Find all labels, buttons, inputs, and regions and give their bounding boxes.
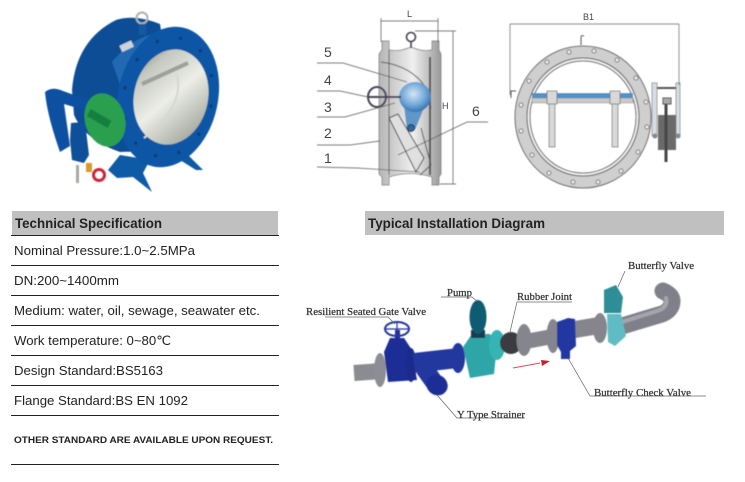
flange bolts [110,27,226,167]
top eye bolt [406,32,416,48]
blue counterweight [399,82,431,132]
leader lines [325,271,706,418]
internal disc and shaft [142,63,188,138]
label: butterfly check valve: Butterfly Check Valve [594,387,691,399]
work temperature: Work temperature: 0~80℃ [14,333,171,348]
counterweight assembly [652,83,680,162]
label: butterfly valve: Butterfly Valve [628,260,694,272]
part numbers: 5 [324,44,332,60]
body highlight [112,35,156,90]
valve housing [379,41,441,185]
pipe flanges [516,313,607,356]
bolt holes [519,49,649,184]
lifting ring detail [368,87,401,107]
flow arrow [513,360,550,368]
medium: Medium: water, oil, sewage, seawater etc. [14,303,260,318]
gate valve [384,322,417,382]
diagram: pipeline installation [306,260,706,421]
drawing: front view [510,24,680,188]
flange standard: Flange Standard:BS EN 1092 [14,393,188,408]
label: rubber joint: Rubber Joint [517,291,572,303]
outlet elbow pipe [622,291,672,326]
lifting eye bolt [136,12,148,35]
pump [463,300,505,378]
disc arms [547,91,620,147]
dimension label B1: B1 [583,12,594,22]
straight pipes [523,325,602,342]
main flange [104,17,232,177]
valve body [72,18,180,152]
support feet [108,155,203,192]
drain rod [76,165,79,183]
nameplate [119,40,134,52]
orange fitting [86,163,92,172]
part numbers: 4 [324,72,332,88]
drawing: side section view [317,18,488,185]
row dividers [11,236,279,464]
top lug and side stub [511,36,584,98]
flange ring [515,46,651,188]
label: y type strainer: Y Type Strainer [457,409,525,421]
part numbers: 1 [324,150,332,166]
design standard: Design Standard:BS5163 [14,363,163,378]
red hand wheel [94,170,104,180]
part numbers: 3 [324,99,332,115]
heading: technical specification [12,211,278,235]
hinged disc [389,114,424,172]
label: pump: Pump [447,287,472,299]
blue shaft [532,93,633,103]
Y type strainer [414,343,465,400]
part numbers: 2 [324,125,332,141]
dimension B1 lines [510,24,679,95]
dimension labels: H [442,101,448,111]
inner outlines [381,50,431,175]
leader lines [317,63,488,172]
table: specification rows [11,236,279,464]
green cover [79,89,131,151]
cylinder [70,122,89,163]
dimension L and H [381,18,456,184]
heading: typical installation diagram: Typical Installation Diagram [368,216,545,231]
weight lever [45,89,88,152]
rubber joint [500,332,522,354]
inlet pipe [354,371,382,373]
part numbers [324,44,480,166]
nominal pressure: Nominal Pressure:1.0~2.5MPa [14,243,196,258]
photo: butterfly check valve [45,12,232,192]
butterfly check valve [557,318,576,359]
valve bore [125,42,217,152]
inlet flange [374,353,386,387]
note: OTHER STANDARD ARE AVAILABLE UPON REQUEST. [14,435,273,445]
dimension labels: L [407,9,412,19]
heading: technical specification: Technical Specification [15,216,162,231]
DN: DN:200~1400mm [14,273,119,288]
butterfly valve [604,285,626,346]
part numbers: 6 [472,103,480,119]
label: resilient seated gate valve: Resilient Seated Gate Valve [306,306,426,318]
dimension labels [407,9,448,111]
heading: typical installation diagram [365,211,724,235]
